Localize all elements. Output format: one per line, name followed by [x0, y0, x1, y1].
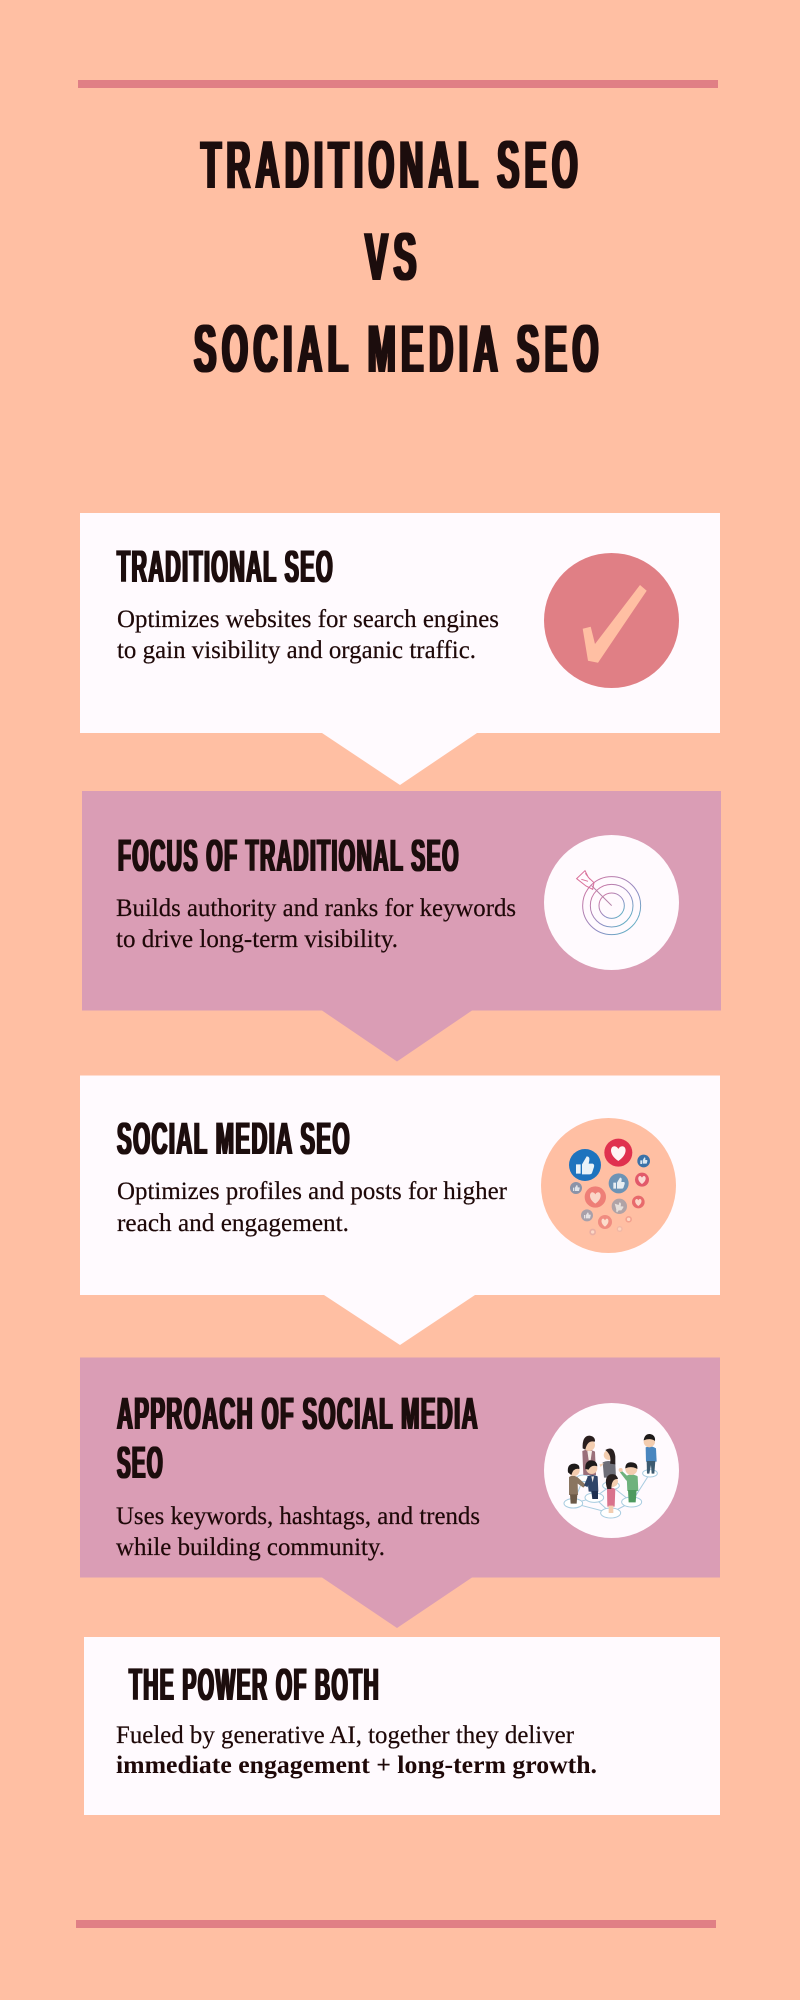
body text	[117, 606, 499, 664]
icon: likes and hearts	[541, 1118, 676, 1253]
bottom accent bar	[76, 1920, 716, 1928]
panel: social media seo	[80, 1076, 720, 1345]
panel: social media seo: SOCIAL MEDIA SEO	[117, 1113, 351, 1164]
body text	[117, 1178, 508, 1237]
panel: traditional seo	[80, 513, 720, 785]
body text: to drive long-term visibility.	[116, 926, 398, 953]
body text	[116, 895, 516, 953]
body text	[116, 1722, 597, 1779]
heading: SEO	[117, 1437, 164, 1488]
body text: Optimizes profiles and posts for higher	[117, 1178, 508, 1205]
body text	[116, 1503, 480, 1561]
panel: approach of social media seo	[80, 1358, 720, 1628]
icon: target with arrow	[544, 835, 679, 970]
icon: check mark	[544, 553, 679, 688]
title	[194, 127, 604, 387]
body text: Uses keywords, hashtags, and trends	[116, 1503, 480, 1530]
card shape with pointer	[80, 513, 720, 785]
panel: the power of both	[84, 1637, 720, 1815]
card shape with pointer	[80, 1358, 720, 1628]
body text: Builds authority and ranks for keywords	[116, 895, 516, 922]
heading	[117, 1388, 479, 1488]
icon: people network	[544, 1403, 679, 1538]
body text: reach and engagement.	[117, 1210, 349, 1237]
panel: the power of both: THE POWER OF BOTH	[129, 1659, 380, 1710]
body text: while building community.	[116, 1534, 385, 1561]
panel: traditional seo: TRADITIONAL SEO	[117, 541, 334, 592]
body text: immediate engagement + long-term growth.	[116, 1752, 597, 1779]
body text: to gain visibility and organic traffic.	[117, 637, 476, 664]
panel: focus of traditional seo	[82, 791, 721, 1062]
card shape with pointer	[82, 791, 721, 1062]
top accent bar	[78, 80, 718, 88]
card background	[84, 1637, 720, 1815]
card shape with pointer	[80, 1076, 720, 1345]
body text: Fueled by generative AI, together they deliver	[116, 1722, 575, 1749]
body text: Optimizes websites for search engines	[117, 606, 499, 633]
title: VS	[365, 219, 422, 295]
